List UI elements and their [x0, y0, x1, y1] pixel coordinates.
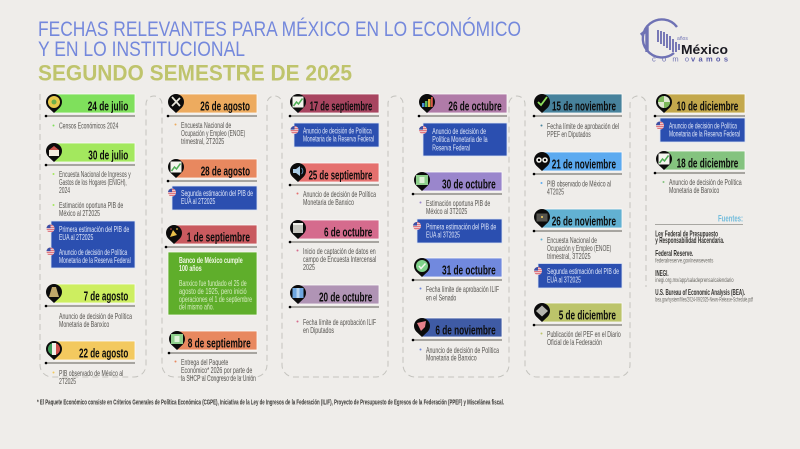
- event: 30 de octubre: [412, 172, 502, 243]
- event: 30 de julio: [45, 143, 135, 268]
- event: 22 de agosto: 2T2025: [59, 376, 76, 386]
- event: 1 de septiembre: 100 años: [179, 263, 202, 273]
- sources: Fuentes: Ley Federal de Presupuesto: [655, 230, 718, 238]
- event: 30 de octubre: EUA al 3T2025: [426, 230, 460, 240]
- event: 31 de octubre: en el Senado: [426, 292, 457, 302]
- sources: Fuentes: Federal Reserve.: [655, 249, 693, 258]
- event: 1 de septiembre: Banxico fue fundado el 25 de: [179, 278, 247, 288]
- event: 15 de noviembre: [533, 94, 622, 139]
- sources: Fuentes: Fuentes:: [718, 214, 743, 224]
- event: 7 de agosto: 7 de agosto: [84, 288, 128, 304]
- sources: Fuentes: y Responsabilidad Hacendaria.: [655, 236, 724, 245]
- event: 30 de julio: Primera estimación del PIB de: [59, 224, 130, 234]
- event: 6 de octubre: campo de Encuesta Intercensal: [303, 254, 376, 264]
- event: 30 de octubre: 30 de octubre: [442, 176, 496, 192]
- event: 6 de noviembre: Anuncio de decisión de Política: [426, 345, 499, 355]
- logo: México cómo vamos 10 años: años: [677, 36, 688, 42]
- event: 6 de noviembre: 6 de noviembre: [435, 322, 496, 338]
- event: 20 de octubre: Fecha límite de aprobación ILIF: [303, 317, 376, 327]
- event: 10 de diciembre: Monetaria de la Reserva Federal: [669, 128, 740, 138]
- event: 7 de agosto: Anuncio de decisión de Política: [59, 311, 132, 321]
- event: 30 de julio: México al 2T2025: [59, 208, 100, 218]
- sources: Fuentes: federalreserve.gov/newsevents: [655, 258, 713, 264]
- event: 15 de noviembre: 15 de noviembre: [552, 98, 616, 114]
- title block: SEGUNDO SEMESTRE DE 2025: [38, 60, 352, 86]
- event: 1 de septiembre: agosto de 1925, pero inició: [179, 286, 247, 296]
- dashed serpentine timeline path: [40, 94, 646, 377]
- sources: Fuentes: inegi.org.mx/app/saladeprensa/calendario: [655, 278, 734, 284]
- event: 31 de octubre: Fecha límite de aprobación ILIF: [426, 284, 499, 294]
- event: 8 de septiembre: Entrega del Paquete: [181, 357, 229, 367]
- event: 25 de septiembre: [289, 163, 379, 207]
- event: 26 de octubre: Anuncio de decisión de: [432, 126, 486, 136]
- event: 30 de julio: EUA al 2T2025: [59, 232, 94, 242]
- event: 5 de diciembre: 5 de diciembre: [559, 308, 616, 322]
- title block: Y EN LO INSTITUCIONAL: [38, 38, 245, 61]
- event: 26 de agosto: Encuesta Nacional de: [181, 120, 232, 130]
- sources: Fuentes: [655, 214, 753, 304]
- event: 30 de julio: Estimación oportuna PIB de: [59, 200, 124, 210]
- event: 10 de diciembre: Anuncio de decisión de Política: [669, 120, 737, 130]
- event: 18 de diciembre: Monetaria de Banxico: [669, 185, 720, 195]
- event: 26 de agosto: 26 de agosto: [200, 98, 250, 114]
- event: 5 de diciembre: Oficial de la Federación: [547, 337, 602, 347]
- event: 5 de diciembre: [533, 303, 622, 347]
- event: 15 de noviembre: PPEF en Diputados: [547, 129, 591, 139]
- event: 22 de agosto: [45, 341, 135, 386]
- event: 26 de agosto: Ocupación y Empleo (ENOE): [181, 128, 245, 138]
- event: 30 de octubre: Estimación oportuna PIB de: [426, 198, 491, 208]
- event: 31 de octubre: 31 de octubre: [442, 262, 496, 278]
- event: 31 de octubre: [412, 258, 502, 302]
- event: 21 de noviembre: 21 de noviembre: [552, 156, 616, 172]
- logo: México cómo vamos 10 años: [641, 19, 728, 63]
- event: 30 de julio: Anuncio de decisión de Política: [59, 247, 127, 257]
- event: 6 de octubre: Inicio de captación de datos en: [303, 246, 376, 256]
- event: 8 de septiembre: Económico* 2026 por parte de: [181, 365, 253, 375]
- event: 20 de octubre: en Diputados: [303, 325, 334, 335]
- event: 10 de diciembre: 10 de diciembre: [677, 98, 738, 114]
- event: 26 de agosto: [167, 94, 257, 146]
- event: 22 de agosto: PIB observado de México al: [59, 368, 123, 378]
- event: 26 de noviembre: 26 de noviembre: [552, 214, 616, 228]
- event: 30 de julio: 2024: [59, 185, 70, 195]
- event: 1 de septiembre: [165, 225, 257, 315]
- event: 1 de septiembre: 1 de septiembre: [187, 230, 250, 244]
- event: 1 de septiembre: del mismo año.: [179, 302, 214, 312]
- event: 18 de diciembre: [654, 151, 745, 195]
- event: 28 de agosto: Segunda estimación del PIB de: [181, 188, 253, 198]
- event: 7 de agosto: [45, 284, 135, 329]
- title block: [38, 18, 521, 86]
- event: 30 de julio: 30 de julio: [88, 148, 128, 162]
- event: 28 de agosto: 28 de agosto: [201, 164, 250, 178]
- event: 30 de julio: Gastos de los Hogares (ENIGH),: [59, 177, 127, 187]
- event: 6 de noviembre: [412, 318, 502, 362]
- event: 26 de agosto: trimestral, 2T2025: [181, 136, 225, 146]
- event: 6 de octubre: 6 de octubre: [324, 224, 372, 240]
- event: 26 de octubre: Reserva Federal: [432, 142, 470, 152]
- event: 30 de octubre: Primera estimación del PIB de: [426, 222, 497, 232]
- event: 20 de octubre: 20 de octubre: [319, 290, 372, 304]
- event: 1 de septiembre: Banco de México cumple: [179, 255, 243, 265]
- event: 24 de julio: Censos Económicos 2024: [59, 120, 118, 130]
- event: 26 de noviembre: Encuesta Nacional de: [547, 235, 597, 245]
- event: 10 de diciembre: [654, 94, 745, 142]
- event: 7 de agosto: Monetaria de Banxico: [59, 319, 110, 329]
- event: 26 de noviembre: trimestral, 3T2025: [547, 251, 591, 261]
- event: 28 de agosto: [167, 159, 257, 210]
- title block: FECHAS RELEVANTES PARA MÉXICO EN LO ECONÓMICO: [38, 18, 521, 41]
- event: 30 de julio: Encuesta Nacional de Ingresos y: [59, 169, 131, 179]
- event: 26 de noviembre: [533, 209, 622, 288]
- event: 26 de octubre: [418, 94, 507, 156]
- event: 6 de noviembre: Monetaria de Banxico: [426, 352, 477, 362]
- event: 25 de septiembre: Monetaria de Banxico: [303, 197, 354, 207]
- event: 24 de julio: [45, 94, 135, 130]
- event: 8 de septiembre: la SHCP al Congreso de la Unión: [181, 373, 256, 383]
- event: 30 de octubre: México al 3T2025: [426, 206, 468, 216]
- event: 8 de septiembre: 8 de septiembre: [188, 336, 251, 350]
- event: 18 de diciembre: 18 de diciembre: [677, 156, 738, 170]
- event: 8 de septiembre: [168, 331, 257, 383]
- event: 21 de noviembre: 4T2025: [547, 186, 564, 196]
- event: 21 de noviembre: [533, 152, 622, 196]
- event: 25 de septiembre: Anuncio de decisión de Política: [303, 189, 376, 199]
- event: 6 de octubre: 2025: [303, 262, 315, 272]
- event: 21 de noviembre: PIB observado de México al: [547, 178, 611, 188]
- event: 26 de noviembre: Segunda estimación del PIB de: [547, 266, 619, 276]
- event: 17 de septiembre: 17 de septiembre: [310, 98, 372, 114]
- event: 24 de julio: 24 de julio: [88, 98, 128, 114]
- event: 30 de julio: Monetaria de la Reserva Federal: [59, 255, 131, 265]
- event: 22 de agosto: 22 de agosto: [79, 346, 128, 360]
- event: 17 de septiembre: [289, 94, 379, 147]
- event: 20 de octubre: [289, 285, 379, 335]
- logo: México cómo vamos 10 años: México: [681, 43, 728, 57]
- event: 18 de diciembre: Anuncio de decisión de Política: [669, 177, 742, 187]
- event: 26 de octubre: 26 de octubre: [448, 98, 502, 114]
- footnote: * El Paquete Económico consiste en Criterios Generales de Política Económica (CGPE), Iniciativa de la Ley de Ingresos de la Federación (ILIF), Proyecto de Presupuesto de Egresos de la Federación (PPEF) y Miscelánea fiscal.: [37, 400, 504, 406]
- logo: México cómo vamos 10 años: como: [652, 54, 689, 64]
- event: 6 de octubre: [289, 220, 379, 272]
- event: 26 de noviembre: EUA al 3T2025: [547, 274, 581, 284]
- event: 1 de septiembre: operaciones el 1 de septiembre: [179, 294, 252, 304]
- event: 28 de agosto: EUA al 2T2025: [181, 196, 216, 206]
- event: 25 de septiembre: 25 de septiembre: [309, 168, 372, 182]
- logo: México cómo vamos 10 años: vamos: [691, 54, 728, 64]
- event: 17 de septiembre: Anuncio de decisión de Política: [303, 126, 372, 136]
- event: 26 de noviembre: Ocupación y Empleo (ENOE): [547, 243, 611, 253]
- event: 26 de octubre: Política Monetaria de la: [432, 134, 488, 144]
- event: 17 de septiembre: Monetaria de la Reserva Federal: [303, 134, 374, 144]
- event: 15 de noviembre: Fecha límite de aprobación del: [547, 121, 619, 131]
- sources: Fuentes: INEGI.: [655, 269, 669, 278]
- event: 5 de diciembre: Publicación del PEF en el Diario: [547, 329, 621, 339]
